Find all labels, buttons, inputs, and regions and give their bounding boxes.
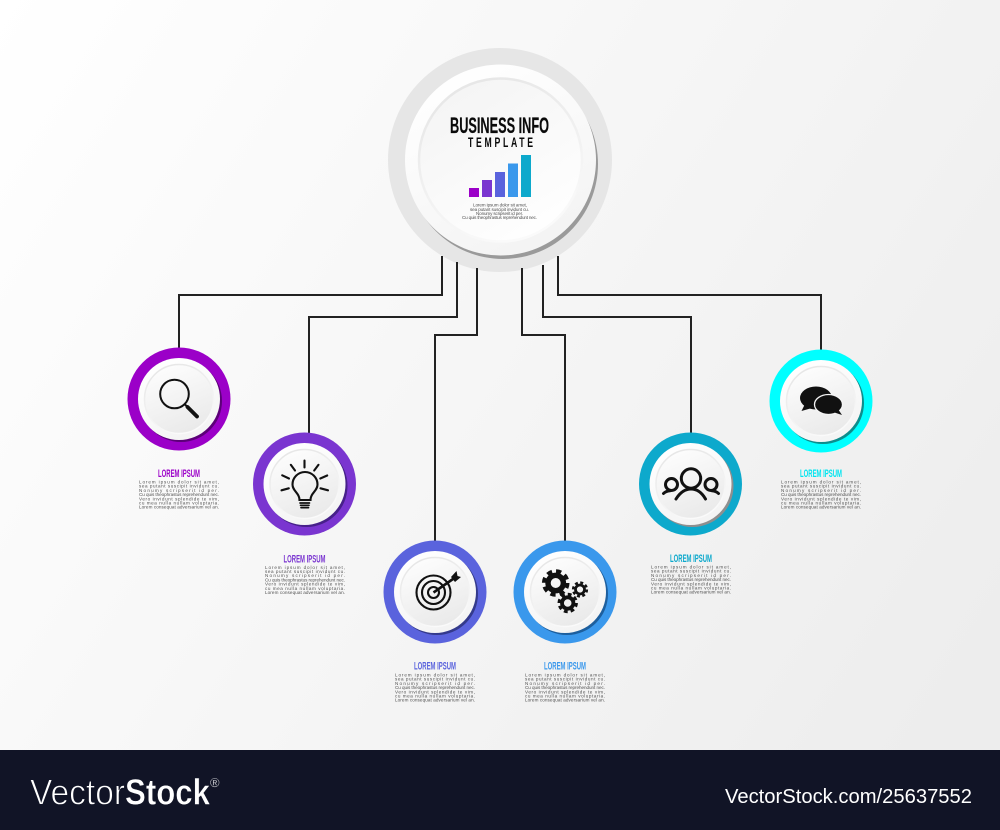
label 1: Cu quis theophrastus reprehendunt nec.	[139, 492, 219, 497]
label 5: LOREM IPSUM	[670, 553, 712, 565]
icon: speech bubbles	[800, 386, 842, 415]
connector lines	[179, 256, 821, 541]
label 2: Lorem ipsum dolor sit amet,	[265, 565, 345, 570]
footer logo: Vector	[30, 772, 125, 812]
footer bar	[0, 750, 1000, 830]
icon: gears	[544, 571, 587, 612]
label 1: sea putant suscipit invidunt cu.	[139, 484, 219, 489]
node 5: people	[639, 432, 742, 536]
label 2: Vero invidunt splendide te vim,	[265, 582, 345, 587]
central circle	[388, 48, 612, 272]
label 5: Nonumy scripserit id per.	[651, 573, 731, 578]
label 3: Cu quis theophrastus reprehendunt nec.	[395, 685, 475, 690]
label 2	[265, 554, 345, 595]
central body text: Nonumy scripserit id per.	[476, 211, 523, 216]
icon: target with arrow	[416, 571, 461, 610]
footer logo: ®	[210, 775, 220, 790]
label 5: cu mea nulla nullam voluptaria.	[651, 586, 731, 590]
footer logo: Stock	[125, 772, 211, 812]
label 4: sea putant suscipit invidunt cu.	[525, 677, 605, 682]
label 4: Cu quis theophrastus reprehendunt nec.	[525, 685, 605, 690]
bar chart	[469, 155, 531, 197]
label 3: Nonumy scripserit id per.	[395, 681, 475, 686]
label 2: Nonumy scripserit id per.	[265, 573, 345, 578]
label 3: sea putant suscipit invidunt cu.	[395, 677, 475, 682]
subtitle: TEMPLATE	[468, 135, 533, 151]
label 1	[139, 468, 219, 510]
label 4: Nonumy scripserit id per.	[525, 681, 605, 686]
label 3	[395, 660, 475, 703]
label 5: Cu quis theophrastus reprehendunt nec.	[651, 577, 731, 582]
label 2: LOREM IPSUM	[284, 554, 326, 566]
central body text: Cu quis theophrastus reprehendunt nec.	[462, 215, 537, 220]
label 6: Lorem consequat adversarium vel an.	[781, 505, 861, 510]
label 2: Lorem consequat adversarium vel an.	[265, 590, 345, 595]
main title: BUSINESS INFO	[450, 113, 549, 138]
label 5: sea putant suscipit invidunt cu.	[651, 569, 731, 574]
label 4	[525, 660, 605, 703]
central body text: sea putant suscipit invidunt cu.	[470, 207, 529, 212]
node 2: idea	[253, 432, 356, 536]
label 1: cu mea nulla nullam voluptaria.	[139, 500, 219, 506]
icon: people group	[664, 469, 718, 499]
label 2: Cu quis theophrastus reprehendunt nec.	[265, 577, 345, 582]
label 1: Vero invidunt splendide te vim,	[139, 496, 219, 501]
label 6: cu mea nulla nullam voluptaria.	[781, 500, 861, 506]
label 1: Nonumy scripserit id per.	[139, 488, 219, 493]
node 1: search	[128, 348, 230, 450]
label 4: Lorem ipsum dolor sit amet,	[525, 672, 605, 678]
label 5: Lorem consequat adversarium vel an.	[651, 590, 731, 595]
label 3: LOREM IPSUM	[414, 660, 456, 672]
icon: magnifier	[160, 380, 197, 416]
label 5	[651, 553, 731, 595]
label 6: Cu quis theophrastus reprehendunt nec.	[781, 492, 861, 497]
label 1: Lorem consequat adversarium vel an.	[139, 505, 219, 510]
footer logo	[30, 772, 220, 812]
label 6	[781, 468, 861, 510]
label 4: Lorem consequat adversarium vel an.	[525, 698, 605, 703]
label 1: LOREM IPSUM	[158, 468, 200, 480]
label 4: cu mea nulla nullam voluptaria.	[525, 694, 605, 698]
label 6: Nonumy scripserit id per.	[781, 488, 861, 493]
label 3: cu mea nulla nullam voluptaria.	[395, 694, 475, 698]
label 3: Vero invidunt splendide te vim,	[395, 689, 475, 694]
node 3: target	[384, 540, 486, 644]
label 6: Lorem ipsum dolor sit amet,	[781, 480, 861, 484]
label 6: LOREM IPSUM	[800, 468, 842, 480]
label 2: sea putant suscipit invidunt cu.	[265, 569, 345, 574]
label 1: Lorem ipsum dolor sit amet,	[139, 480, 219, 484]
central body text	[462, 202, 537, 220]
label 4: LOREM IPSUM	[544, 660, 586, 672]
label 6: Vero invidunt splendide te vim,	[781, 496, 861, 501]
label 5: Lorem ipsum dolor sit amet,	[651, 564, 731, 570]
label 3: Lorem consequat adversarium vel an.	[395, 698, 475, 703]
central body text: Lorem ipsum dolor sit amet,	[473, 202, 527, 208]
icon: light bulb	[282, 460, 328, 508]
node 6: chat	[770, 350, 872, 452]
footer id: VectorStock.com/25637552	[725, 786, 972, 808]
label 3: Lorem ipsum dolor sit amet,	[395, 672, 475, 678]
label 4: Vero invidunt splendide te vim,	[525, 689, 605, 694]
label 5: Vero invidunt splendide te vim,	[651, 581, 731, 586]
label 6: sea putant suscipit invidunt cu.	[781, 484, 861, 489]
node 4: gears	[514, 540, 616, 644]
label 2: cu mea nulla nullam voluptaria.	[265, 586, 345, 591]
